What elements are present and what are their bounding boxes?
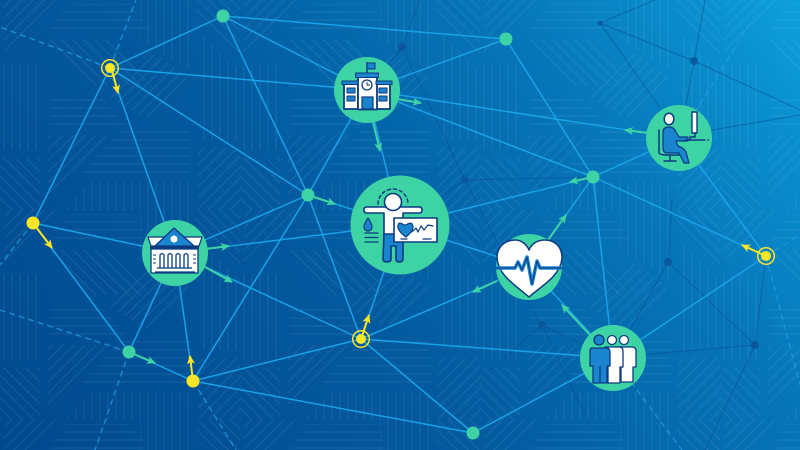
icon: group of people — [580, 325, 646, 391]
icon: school building — [334, 57, 400, 123]
icon: bank building — [142, 220, 208, 286]
green direction arrows — [129, 99, 648, 363]
icon: person with health monitor — [350, 176, 450, 274]
yellow nodes — [26, 60, 774, 387]
icon: heart with pulse — [496, 234, 563, 300]
dark background nodes — [398, 20, 759, 349]
yellow direction arrows — [33, 70, 766, 381]
icon: person at desk computer — [646, 105, 712, 171]
green nodes — [122, 10, 600, 440]
